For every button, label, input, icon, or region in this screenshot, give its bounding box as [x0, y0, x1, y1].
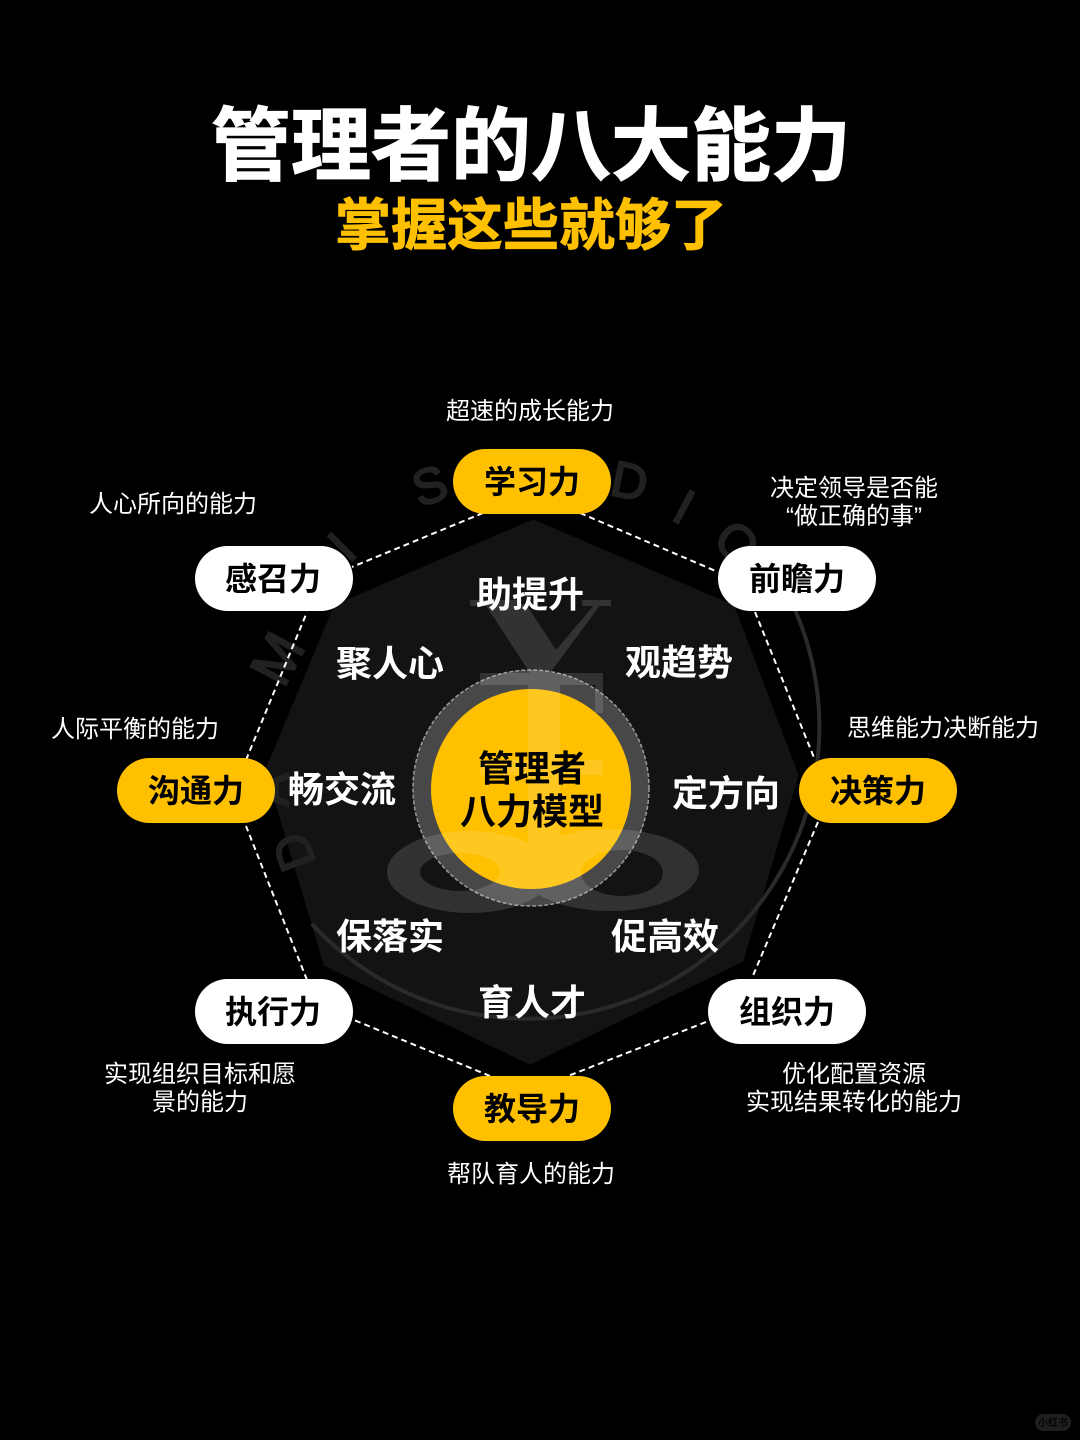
pill: 教导力: 教导力 — [484, 1091, 580, 1127]
watermark: logo emblem — [387, 600, 699, 913]
watermark: studio lettering and arc: A — [243, 773, 299, 807]
watermark: studio lettering and arc — [238, 450, 819, 1019]
pill: 学习力 — [453, 449, 611, 514]
caption: 感召力: 人心所向的能力 — [89, 491, 257, 518]
caption: 学习力: 超速的成长能力 — [446, 398, 614, 425]
subtitle: 掌握这些就够了 — [335, 194, 727, 257]
corner badge: 小红书 — [1038, 1416, 1068, 1429]
center circle — [431, 689, 631, 889]
inner label: 畅交流: 畅交流 — [288, 769, 396, 810]
inner label: 定方向: 定方向 — [672, 773, 780, 814]
watermark: studio lettering and arc: M — [238, 622, 318, 695]
pill: 决策力: 决策力 — [830, 773, 926, 809]
watermark: studio lettering and arc: D — [262, 825, 327, 878]
pill: 组织力 — [708, 979, 866, 1044]
center label: 管理者 — [478, 748, 586, 789]
pill: 前瞻力: 前瞻力 — [749, 561, 845, 597]
inner label: 促高效: 促高效 — [611, 916, 719, 957]
pill: 教导力 — [453, 1076, 611, 1141]
watermark: studio lettering and arc: D — [606, 450, 653, 513]
caption: 前瞻力 — [770, 475, 938, 530]
corner badge — [1035, 1414, 1071, 1431]
caption: 组织力: 优化配置资源 — [782, 1061, 926, 1088]
caption: 教导力: 帮队育人的能力 — [447, 1161, 615, 1188]
caption: 执行力: 实现组织目标和愿 — [104, 1061, 296, 1088]
caption: 组织力 — [746, 1061, 962, 1116]
watermark: studio lettering and arc: O — [704, 509, 770, 577]
caption: 前瞻力: “做正确的事” — [786, 503, 922, 530]
inner label: 保落实: 保落实 — [336, 916, 444, 957]
inner label: 观趋势: 观趋势 — [625, 642, 733, 683]
caption: 组织力: 实现结果转化的能力 — [746, 1089, 962, 1116]
caption: 决策力: 思维能力决断能力 — [847, 715, 1039, 742]
inner label: 育人才: 育人才 — [478, 982, 586, 1023]
watermark: studio lettering and arc: I — [317, 522, 367, 572]
center ring — [413, 670, 649, 906]
pill: 前瞻力 — [718, 546, 876, 611]
pill: 执行力 — [195, 979, 353, 1044]
background octagon panel — [268, 522, 796, 1062]
title: 管理者的八大能力 — [211, 102, 851, 191]
center label — [460, 748, 604, 832]
inner label: 助提升: 助提升 — [476, 574, 584, 615]
pill: 沟通力: 沟通力 — [148, 773, 244, 809]
dashed octagon connector — [246, 513, 818, 1076]
caption: 执行力 — [104, 1061, 296, 1116]
center label: 八力模型 — [460, 791, 604, 832]
pill: 感召力: 感召力 — [225, 561, 321, 597]
caption: 执行力: 景的能力 — [152, 1089, 248, 1116]
pill: 执行力: 执行力 — [225, 994, 321, 1030]
pill: 学习力: 学习力 — [484, 464, 580, 500]
pill: 沟通力 — [117, 758, 275, 823]
watermark: studio lettering and arc: I — [665, 479, 703, 535]
caption: 前瞻力: 决定领导是否能 — [770, 475, 938, 502]
watermark: studio lettering and arc: S — [405, 454, 454, 518]
pill: 感召力 — [195, 546, 353, 611]
pill: 组织力: 组织力 — [739, 994, 835, 1030]
inner label: 聚人心: 聚人心 — [336, 643, 444, 684]
pill: 决策力 — [799, 758, 957, 823]
caption: 沟通力: 人际平衡的能力 — [51, 716, 219, 743]
